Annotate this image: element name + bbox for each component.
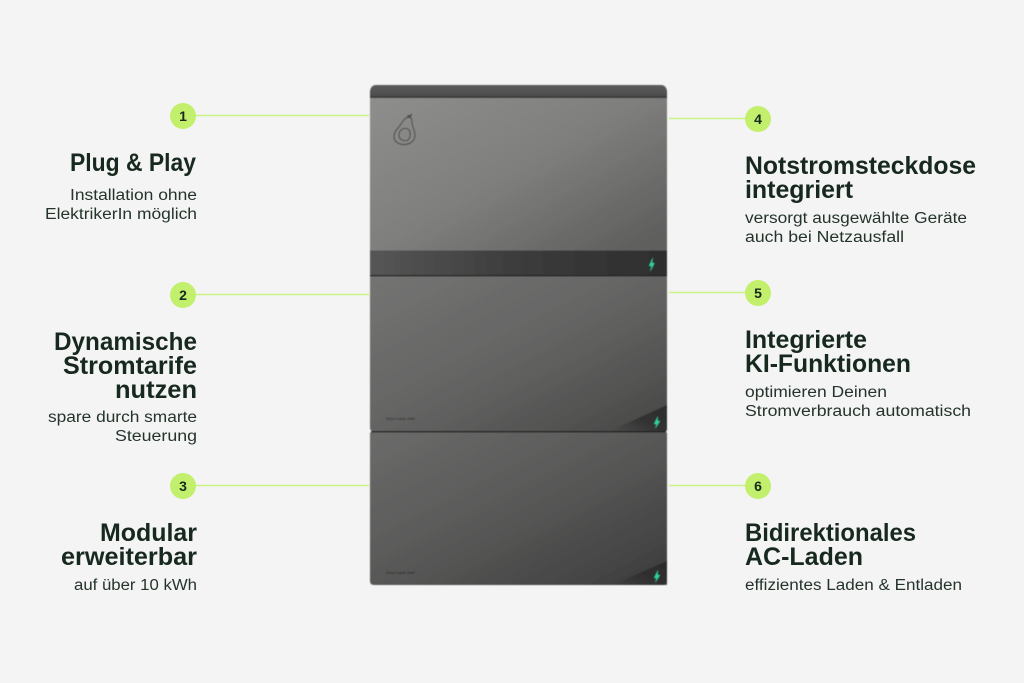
- badge 1: [170, 103, 196, 129]
- text 5: Stromverbrauch automatisch: [745, 403, 971, 420]
- connector 6: [669, 484, 758, 486]
- badge 2: 2: [179, 287, 187, 303]
- connector 1: [183, 114, 369, 116]
- callout 4: [669, 106, 976, 246]
- connector 4: [669, 118, 758, 120]
- heading 4: integriert: [745, 176, 854, 204]
- heading 5: KI-Funktionen: [745, 350, 911, 378]
- heading 2: Dynamische: [54, 328, 197, 356]
- heading 4: [745, 152, 976, 204]
- icon: band bolt: [649, 257, 654, 272]
- band shadow line: [370, 275, 667, 276]
- text 4: versorgt ausgewählte Geräte: [745, 210, 967, 227]
- badge 1: 1: [179, 108, 187, 124]
- connector 5: [669, 292, 758, 294]
- callout 2: [48, 282, 369, 445]
- callout 6: [669, 473, 962, 594]
- module label middle: Short bank 2kW: [386, 416, 415, 421]
- heading 6: [745, 519, 916, 571]
- top module with logo: [370, 98, 667, 251]
- badge 5: [745, 280, 771, 306]
- badge 3: 3: [179, 478, 187, 494]
- heading 2: Stromtarife: [63, 352, 197, 380]
- callout 5: [669, 280, 971, 420]
- icon: pear logo: [394, 114, 415, 144]
- callout 3: [61, 473, 369, 594]
- heading 1: Plug & Play: [70, 149, 196, 177]
- text 2: spare durch smarte: [48, 409, 197, 426]
- dark control band: [370, 250, 667, 276]
- badge 5: 5: [754, 285, 762, 301]
- heading 5: [745, 326, 911, 378]
- heading 2: [54, 328, 197, 404]
- badge 2: [170, 282, 196, 308]
- badge 4: [745, 106, 771, 132]
- text 1: [45, 187, 197, 223]
- connector 2: [183, 294, 369, 296]
- heading 4: Notstromsteckdose: [745, 152, 976, 180]
- icon: middle bolt: [654, 416, 660, 429]
- text 1: ElektrikerIn möglich: [45, 206, 197, 223]
- badge 6: [745, 473, 771, 499]
- callout 1: [45, 103, 369, 223]
- top cover: [370, 85, 667, 98]
- bottom battery module: [370, 432, 667, 585]
- text 4: auch bei Netzausfall: [745, 229, 904, 246]
- text 1: Installation ohne: [70, 187, 197, 204]
- heading 3: erweiterbar: [61, 543, 197, 571]
- text 5: optimieren Deinen: [745, 384, 887, 401]
- corner reflection bottom: [612, 561, 667, 585]
- badge 6: 6: [754, 478, 762, 494]
- battery device: [370, 85, 667, 585]
- middle battery module: [370, 276, 667, 431]
- seam: [371, 431, 666, 432]
- text 4: [745, 210, 967, 246]
- heading 5: Integrierte: [745, 326, 867, 354]
- text 2: [48, 409, 197, 445]
- heading 3: [61, 519, 197, 571]
- text 3: auf über 10 kWh: [74, 577, 197, 594]
- text 2: Steuerung: [115, 428, 197, 445]
- text 6: effizientes Laden & Entladen: [745, 577, 962, 594]
- heading 3: Modular: [100, 519, 197, 547]
- heading 6: Bidirektionales: [745, 519, 916, 547]
- connector 3: [183, 484, 369, 486]
- module label bottom: Short bank 2kW: [386, 570, 415, 575]
- heading 2: nutzen: [115, 376, 197, 404]
- heading 6: AC-Laden: [745, 543, 863, 571]
- corner reflection middle: [610, 405, 667, 431]
- icon: bottom bolt: [654, 570, 660, 583]
- badge 4: 4: [754, 111, 762, 127]
- text 5: [745, 384, 971, 420]
- badge 3: [170, 473, 196, 499]
